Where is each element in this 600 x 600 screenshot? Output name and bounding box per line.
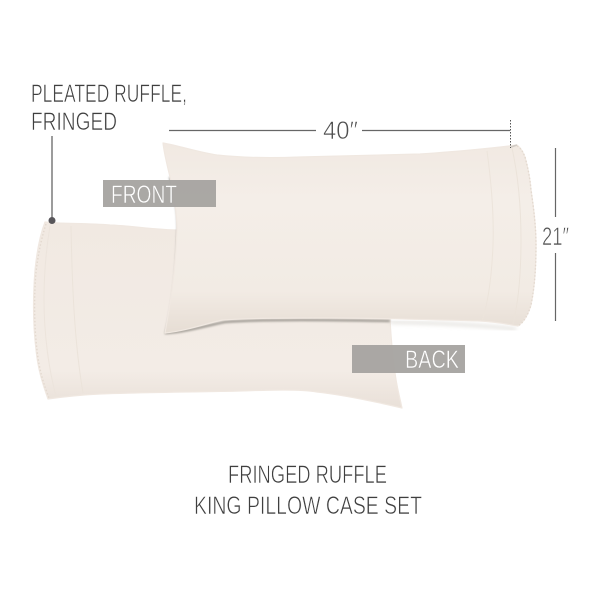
leader line <box>51 136 53 220</box>
caption <box>194 461 422 520</box>
callout: pleated ruffle, fringed: FRINGED <box>31 108 117 136</box>
label: back <box>352 345 465 374</box>
back pillow <box>34 222 402 408</box>
dimension: width 40 inches: 40″ <box>323 117 358 145</box>
caption: KING PILLOW CASE SET <box>194 492 422 520</box>
back pillow hem seam <box>71 226 83 393</box>
callout: pleated ruffle, fringed <box>31 80 187 224</box>
label: back: BACK <box>405 346 459 374</box>
back pillow ruffle <box>35 224 49 398</box>
dimension: height 21 inches: 21″ <box>542 223 569 251</box>
callout: pleated ruffle, fringed: PLEATED RUFFLE, <box>31 80 187 108</box>
caption: FRINGED RUFFLE <box>228 461 387 489</box>
leader dot <box>48 217 56 224</box>
front pillow hem seam <box>482 151 493 321</box>
label: front: FRONT <box>111 181 177 209</box>
front pillow ruffle <box>517 146 536 326</box>
front pillow <box>163 143 536 333</box>
front pillow shadow <box>166 177 516 333</box>
front pillow corner detail <box>511 145 517 147</box>
